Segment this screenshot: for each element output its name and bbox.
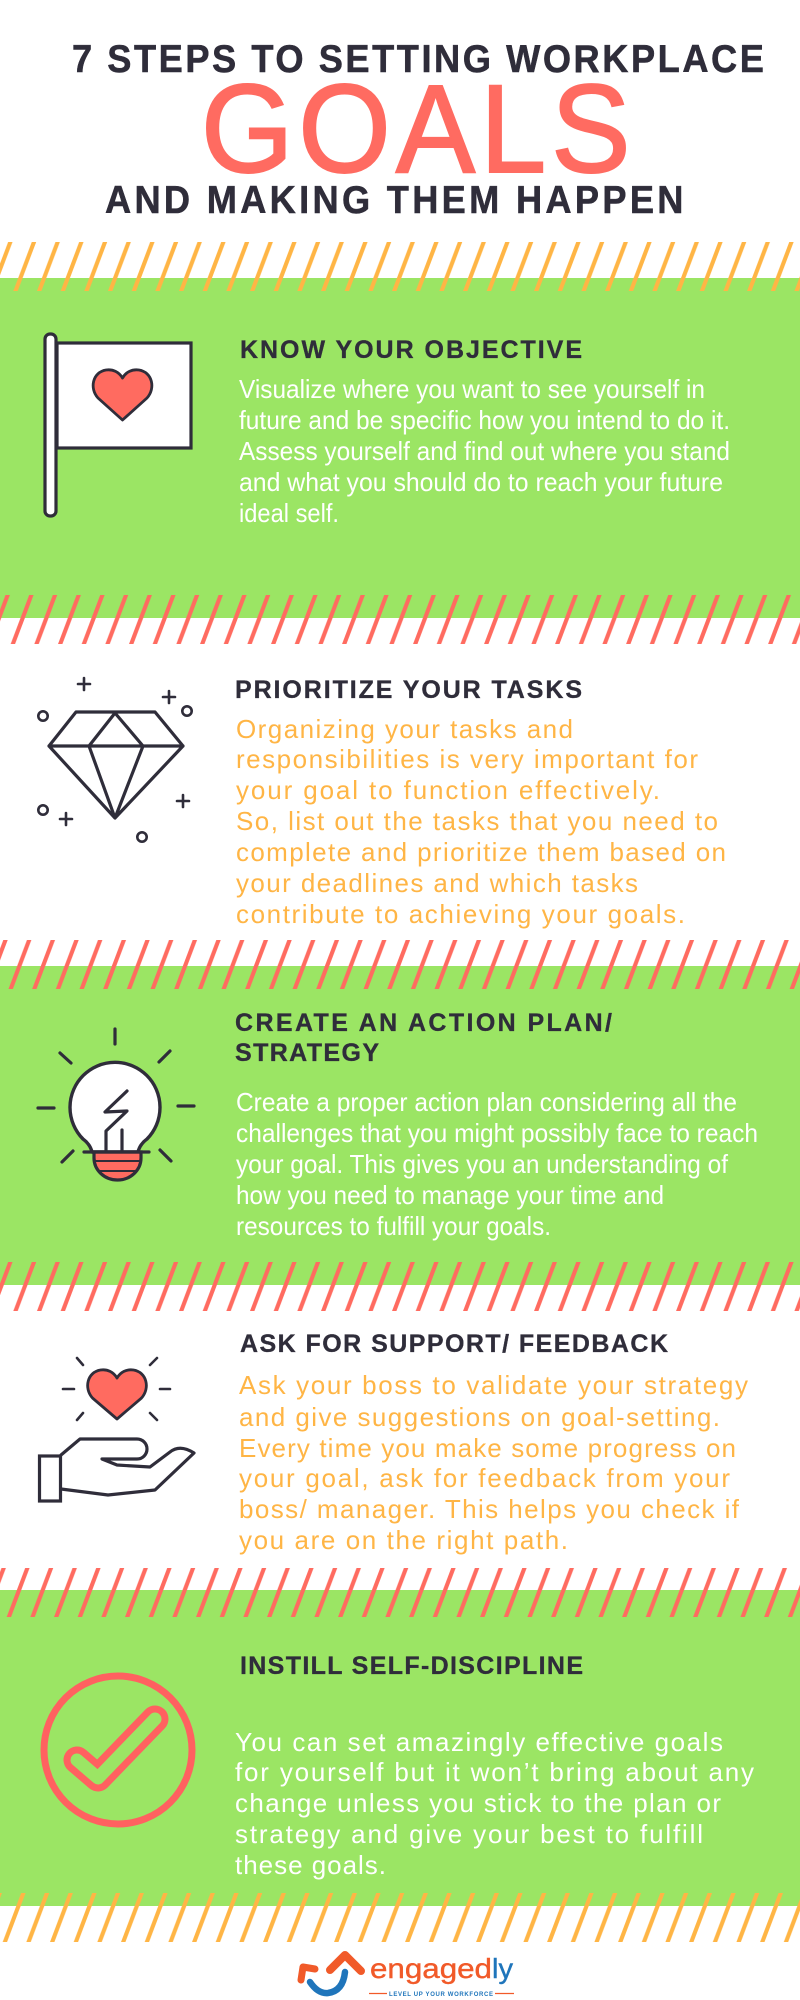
body text: [235, 1727, 754, 1880]
title: [72, 37, 764, 221]
body text: for yourself but it won’t bring about any: [235, 1757, 754, 1787]
body text: responsibilities is very important for: [236, 744, 698, 774]
body text: So, list out the tasks that you need to: [236, 806, 718, 836]
body text: your goal, ask for feedback from your: [239, 1463, 730, 1493]
body text: boss/ manager. This helps you check if: [239, 1494, 740, 1524]
body text: You can set amazingly effective goals: [235, 1727, 723, 1757]
body text: contribute to achieving your goals.: [236, 899, 685, 929]
title line 1: 7 STEPS TO SETTING WORKPLACE: [72, 37, 764, 80]
body text: you are on the right path.: [239, 1525, 568, 1555]
heading: [235, 1009, 612, 1067]
body text: these goals.: [235, 1850, 386, 1880]
icon: hand holding heart: [40, 1358, 194, 1501]
tagline: LEVEL UP YOUR WORKFORCE: [389, 1992, 493, 1998]
body text: Ask your boss to validate your strategy: [239, 1370, 748, 1400]
icon: light bulb: [38, 1029, 194, 1180]
body text: challenges that you might possibly face to reach: [236, 1118, 758, 1148]
panel: know your objective: [0, 278, 800, 618]
body text: how you need to manage your time and: [236, 1180, 664, 1210]
body text: Organizing your tasks and: [236, 714, 573, 744]
body text: strategy and give your best to fulfill: [235, 1819, 703, 1849]
body text: Every time you make some progress on: [239, 1433, 736, 1463]
icon: flag with heart: [45, 334, 191, 516]
panel: ask for support: [0, 1285, 800, 1590]
body text: resources to fulfill your goals.: [236, 1211, 551, 1241]
body text: [239, 1370, 748, 1555]
icon: logo arrows: [301, 1955, 361, 1993]
heading: CREATE AN ACTION PLAN/: [235, 1009, 612, 1037]
body text: complete and prioritize them based on: [236, 837, 726, 867]
heading: ASK FOR SUPPORT/ FEEDBACK: [240, 1330, 668, 1358]
body text: [236, 1087, 758, 1241]
body text: Assess yourself and find out where you stand: [239, 436, 730, 466]
panel: instill self-discipline: [0, 1590, 800, 1906]
body text: and what you should do to reach your future: [239, 467, 723, 497]
body text: Create a proper action plan considering all the: [236, 1087, 737, 1117]
heading: INSTILL SELF-DISCIPLINE: [240, 1652, 583, 1680]
icon: diamond with sparkles: [38, 678, 192, 842]
body text: your goal. This gives you an understanding of: [236, 1149, 729, 1179]
body text: Visualize where you want to see yourself in: [239, 374, 705, 404]
icon: check mark in circle: [44, 1676, 192, 1824]
body text: [239, 374, 730, 528]
body text: your deadlines and which tasks: [236, 868, 638, 898]
heading: PRIORITIZE YOUR TASKS: [235, 676, 582, 704]
panel: prioritize your tasks: [0, 618, 800, 966]
body text: change unless you stick to the plan or: [235, 1788, 721, 1818]
logo: engagedly: [301, 1953, 514, 1998]
logo: engagedly: ly: [492, 1953, 513, 1984]
wordmark: engaged: [370, 1953, 492, 1984]
title line 3: AND MAKING THEM HAPPEN: [105, 178, 683, 221]
title word: GOALS: GOALS: [201, 59, 630, 199]
body text: your goal to function effectively.: [236, 775, 660, 805]
heading: STRATEGY: [235, 1039, 379, 1067]
panel: create an action plan: [0, 966, 800, 1285]
body text: ideal self.: [239, 498, 339, 528]
heading: KNOW YOUR OBJECTIVE: [240, 336, 582, 364]
body text: future and be specific how you intend to do it.: [239, 405, 730, 435]
body text: [236, 714, 726, 929]
body text: and give suggestions on goal-setting.: [239, 1402, 720, 1432]
